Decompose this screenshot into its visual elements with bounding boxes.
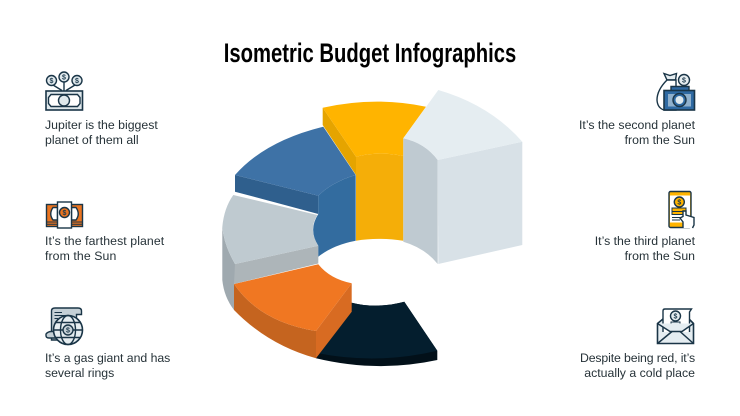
text: farthest: It’s the farthest planet bbox=[45, 234, 164, 248]
text: red planet bbox=[580, 351, 695, 380]
icon: coins above banknote: $ bbox=[62, 74, 66, 82]
text: red planet: actually a cold place bbox=[584, 366, 695, 380]
text: second planet bbox=[579, 118, 695, 147]
segment: blue bbox=[235, 127, 356, 257]
segment: orange bbox=[234, 264, 352, 358]
text: Jupiter: planet of them all bbox=[45, 133, 139, 147]
icon: phone with coin and hand: $ bbox=[677, 200, 681, 206]
segment: navy bbox=[316, 302, 437, 366]
text: red planet: Despite being red, it’s bbox=[580, 351, 695, 365]
icon: coins above banknote: $ bbox=[50, 78, 54, 85]
icon: coins above banknote: $ bbox=[75, 78, 79, 85]
text: gas giant bbox=[45, 351, 170, 380]
icon: stack of orange banknotes: $ bbox=[63, 210, 67, 217]
text: farthest: from the Sun bbox=[45, 249, 116, 263]
text: Jupiter bbox=[45, 118, 158, 147]
text: farthest bbox=[45, 234, 164, 263]
segment: light tall bbox=[403, 90, 522, 264]
title: Isometric Budget Infographics bbox=[224, 38, 516, 68]
text: third planet bbox=[595, 234, 695, 263]
text: gas giant: several rings bbox=[45, 366, 114, 380]
text: second planet: from the Sun bbox=[625, 133, 695, 147]
text: second planet: It’s the second planet bbox=[579, 118, 695, 132]
icon: scroll and globe: $ bbox=[66, 328, 70, 334]
icon: money bag and banknote: $ bbox=[682, 78, 686, 84]
segment: yellow bbox=[323, 102, 426, 241]
text: Jupiter: Jupiter is the biggest bbox=[45, 118, 158, 132]
segment: grey bbox=[222, 195, 318, 310]
text: third planet: from the Sun bbox=[625, 249, 695, 263]
text: gas giant: It’s a gas giant and has bbox=[45, 351, 170, 365]
text: third planet: It’s the third planet bbox=[595, 234, 695, 248]
icon: envelope with letter: $ bbox=[674, 314, 678, 320]
